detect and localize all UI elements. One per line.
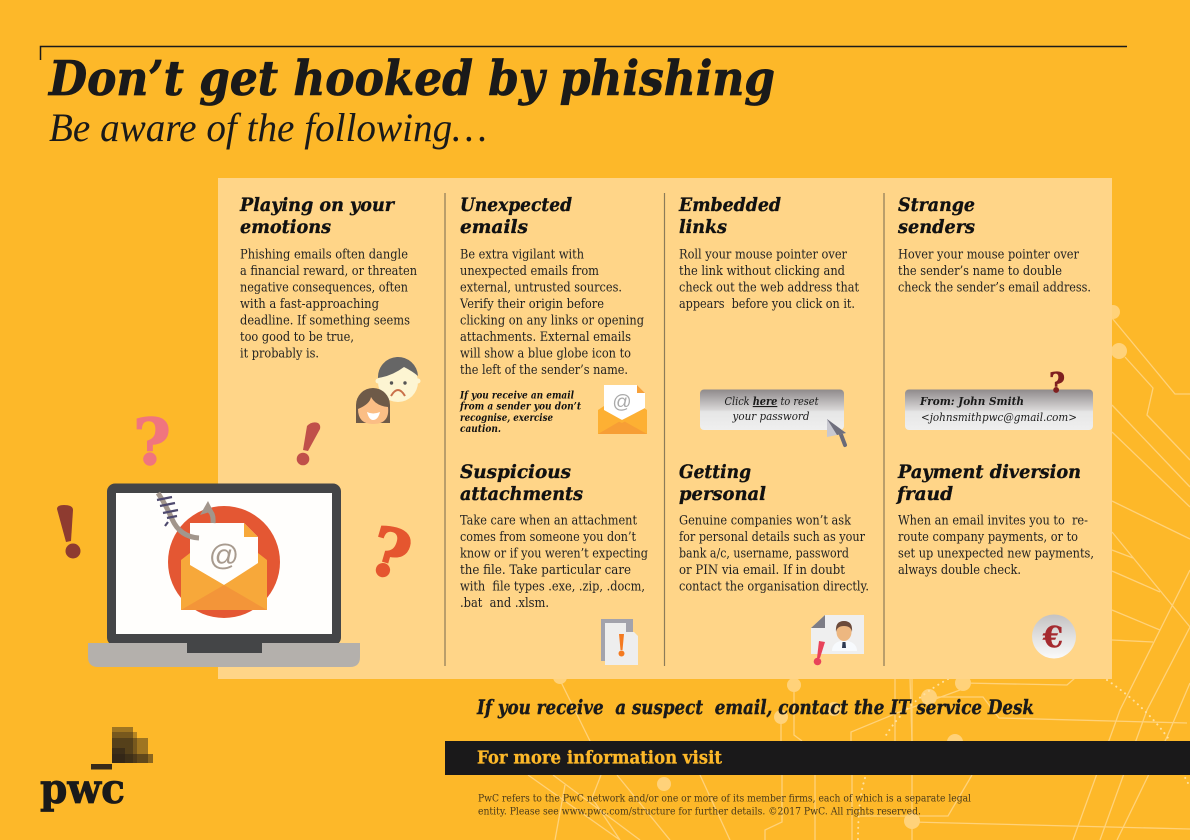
icon: euro coin [1032,614,1076,658]
icon: small envelope: @ [612,392,632,413]
heading: senders [897,217,976,238]
body text: Genuine companies won’t ask [679,514,852,528]
logo: PwC: pwc [40,765,125,813]
icon: mouse cursor [827,419,846,445]
body text [240,248,417,362]
top rule [40,46,1127,60]
laptop notch [187,643,262,653]
envelope: @ [209,539,239,572]
panel: payment diversion fraud [895,462,1094,658]
heading: Unexpected [460,195,572,216]
body text: for personal details such as your [679,530,866,545]
heading [895,462,1081,505]
caution note [459,390,581,435]
callout: contact IT: If you receive a suspect email, contact the IT service Desk [476,696,1034,719]
body text: clicking on any links or opening [460,314,644,328]
panel: strange senders [897,195,1093,430]
illustration: laptop with phishing email [57,405,419,667]
banner: more information [445,741,1190,775]
body text: set up unexpected new payments, [898,546,1094,562]
heading: Embedded [678,195,781,216]
heading [460,462,584,505]
body text: Hover your mouse pointer over [898,248,1080,262]
body text: check the sender’s email address. [898,280,1091,296]
icon: faces [356,357,420,424]
banner: more information: For more information visit [477,748,722,768]
body text: When an email invites you to re- [898,514,1088,528]
heading: links [679,217,728,238]
heading [897,195,976,238]
example sender box: <johnsmithpwc@gmail.com> [921,411,1077,424]
heading: fraud [895,484,953,505]
heading: emails [460,217,529,238]
legal text: entity. Please see www.pwc.com/structure for further details. ©2017 PwC. All rights reserved. [478,806,921,818]
body text: a financial reward, or threaten [240,264,417,279]
background circuit pattern [528,318,1190,840]
body text [898,514,1094,578]
body text: it probably is. [240,346,319,362]
laptop bezel [107,484,341,646]
body text: will show a blue globe icon to [460,346,631,362]
panel: unexpected emails [459,195,647,435]
body text: the left of the sender’s name. [460,363,628,378]
body text [679,514,869,594]
panel: content background [218,178,1112,679]
icon: fish hook [157,493,213,538]
caution note: caution. [460,423,501,435]
title: Don’t get hooked by phishing [47,51,775,107]
circuit dots [553,305,1127,829]
heading: personal [679,484,766,505]
question mark orange: ? [361,511,419,596]
example link button: Click here to reset [724,395,819,408]
laptop screen [116,493,332,634]
body text: external, untrusted sources. [460,280,622,296]
body text: the sender’s name to double [898,264,1062,279]
icon: warning document [601,619,638,665]
subtitle: Be aware of the following… [49,105,487,150]
envelope [181,523,267,610]
example sender box [905,390,1093,430]
legal text: PwC refers to the PwC network and/or one or more of its member firms, each of which is a separate legal [478,792,972,804]
caution note: If you receive an email [459,390,574,402]
exclamation dark [57,505,80,558]
example link button: your password [732,410,810,423]
body text: Verify their origin before [459,297,604,312]
laptop base [88,643,360,667]
body text: the file. Take particular care [460,563,631,578]
question mark pink: ? [133,405,171,480]
body text: route company payments, or to [898,530,1078,545]
body text: with a fast-approaching [240,297,379,312]
heading [678,195,781,238]
heading [239,195,395,238]
panel: getting personal [679,462,869,665]
panel: suspicious attachments [460,462,648,665]
heading: emotions [240,217,332,238]
body text: bank a/c, username, password [679,546,849,562]
body text: know or if you weren’t expecting [460,546,648,562]
caution note: recognise, exercise [460,412,553,424]
panel: playing on your emotions [239,195,420,424]
logo: PwC [40,727,153,813]
body text: Roll your mouse pointer over [679,248,848,262]
heading: Payment diversion [897,462,1081,483]
body text: comes from someone you don’t [460,530,637,545]
icon: person card [811,615,864,665]
body text: Phishing emails often dangle [240,248,408,262]
body text: .bat and .xlsm. [460,596,549,611]
heading: attachments [460,484,584,505]
icon: question mark: ? [1049,368,1065,399]
column dividers [445,193,884,666]
body text: negative consequences, often [240,280,408,296]
heading [679,462,766,505]
body text: deadline. If something seems [240,314,410,328]
body text: Take care when an attachment [460,514,638,528]
body text: too good to be true, [240,330,354,345]
body text: with file types .exe, .zip, .docm, [460,580,645,594]
body text: Be extra vigilant with [460,248,584,262]
body text [679,248,860,312]
body text: the link without clicking and [679,264,845,279]
body text [460,514,648,611]
heading: Strange [898,195,975,216]
heading: Getting [679,462,751,483]
body text [898,248,1091,296]
body text [459,248,644,378]
heading: Suspicious [460,462,572,483]
heading: Playing on your [239,195,395,216]
body text: check out the web address that [679,280,860,296]
body text: appears before you click on it. [679,297,855,312]
red circle [168,506,280,618]
circuit dotted arcs [858,679,1190,840]
panel: embedded links [678,195,860,445]
icon: euro coin: € [1042,620,1063,654]
exclamation red [297,422,320,465]
body text: or PIN via email. If in doubt [679,563,846,578]
body text: attachments. External emails [460,330,631,345]
body text: unexpected emails from [460,264,599,279]
example link button [700,390,844,430]
heading [460,195,572,238]
caution note: from a sender you don’t [459,400,581,412]
body text: always double check. [898,563,1021,578]
example sender box: From: John Smith [919,394,1024,408]
legal text [478,792,972,818]
icon: small envelope [598,385,647,434]
body text: contact the organisation directly. [679,580,869,594]
